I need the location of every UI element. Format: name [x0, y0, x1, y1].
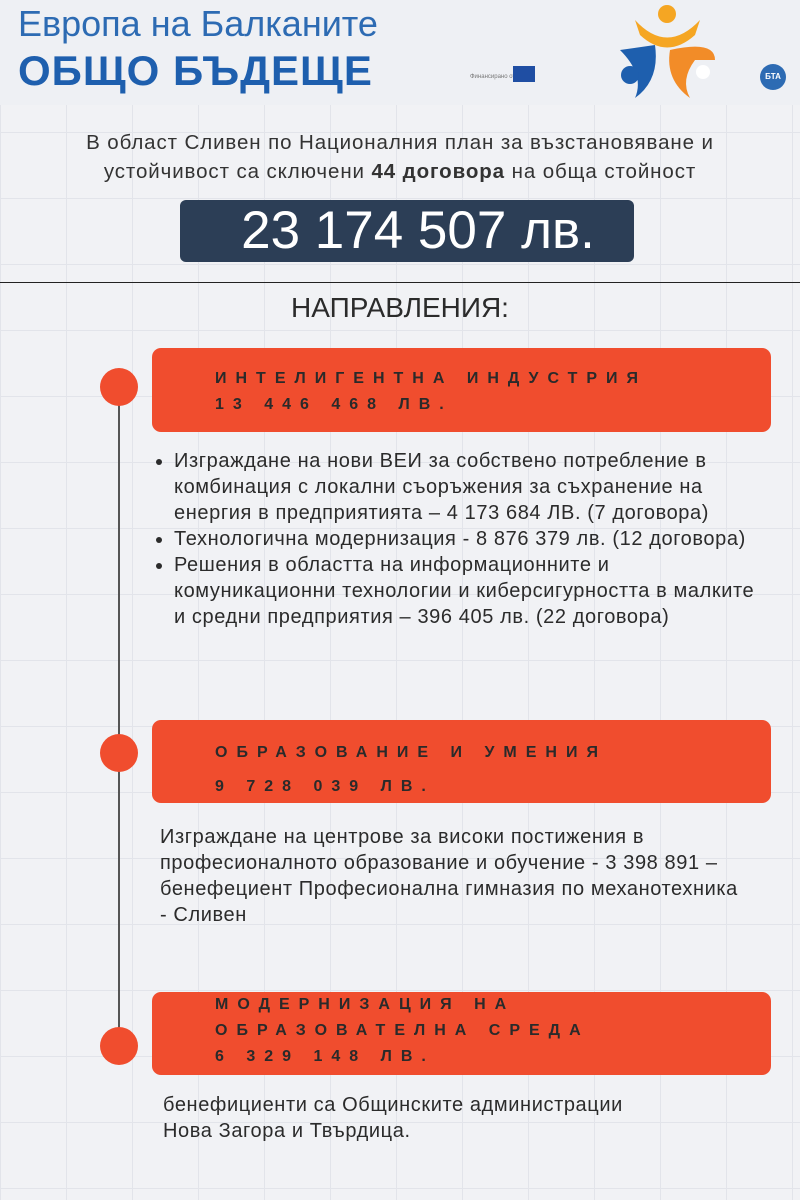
list: industry: Изграждане на нови ВЕИ за собствено потребление в: [174, 450, 707, 472]
text: education: - Сливен: [160, 904, 247, 926]
list: industry: енергия в предприятията – 4 173 684 ЛВ. (7 договора): [174, 502, 709, 524]
box: education environment: МОДЕРНИЗАЦИЯ НА: [215, 996, 515, 1013]
timeline dot 2: [100, 734, 138, 772]
box: education: [152, 720, 771, 803]
box: education environment: 6 329 148 ЛВ.: [215, 1048, 435, 1065]
EU logo: [470, 66, 535, 82]
BTA logo: [760, 64, 786, 90]
timeline dot 1: [100, 368, 138, 406]
project logo: [620, 5, 715, 98]
total amount box: 23 174 507 лв.: [241, 201, 595, 260]
intro text: [86, 131, 714, 183]
text: education: Изграждане на центрове за високи постижения в: [160, 826, 644, 848]
BTA logo: БТА: [765, 72, 781, 81]
EU logo: Финансирано от: [470, 74, 515, 80]
text: education: [160, 826, 738, 926]
box: education environment: [152, 992, 771, 1075]
header title: Европа на Балканите: [18, 3, 378, 44]
list: industry: Технологична модернизация - 8 876 379 лв. (12 договора): [174, 528, 746, 550]
list: industry: комбинация с локални съоръжения за съхранение на: [174, 476, 703, 498]
box: intelligent industry: [152, 348, 771, 432]
text: beneficiaries: бенефициенти са Общинските администрации: [163, 1094, 623, 1116]
list: industry: и средни предприятия – 396 405 лв. (22 договора): [174, 606, 669, 628]
intro text: устойчивост са сключени 44 договора на обща стойност: [104, 160, 696, 183]
list: industry: комуникационни технологии и киберсигурността в малките: [174, 580, 754, 602]
list: industry: Решения в областта на информационните и: [174, 554, 610, 576]
text: education: бенефециент Професионална гимназия по механотехника: [160, 878, 738, 900]
box: intelligent industry: 13 446 468 ЛВ.: [215, 396, 453, 413]
box: education: ОБРАЗОВАНИЕ И УМЕНИЯ: [215, 744, 607, 761]
header subtitle: ОБЩО БЪДЕЩЕ: [18, 47, 373, 94]
section heading: НАПРАВЛЕНИЯ:: [291, 292, 509, 323]
timeline dot 3: [100, 1027, 138, 1065]
box: education environment: ОБРАЗОВАТЕЛНА СРЕДА: [215, 1022, 590, 1039]
text: education: професионалното образование и обучение - 3 398 891 –: [160, 852, 718, 874]
text: beneficiaries: [163, 1094, 623, 1142]
timeline line: [118, 386, 120, 1046]
intro text: В област Сливен по Националния план за възстановяване и: [86, 131, 714, 154]
header banner: [0, 0, 800, 105]
box: intelligent industry: ИНТЕЛИГЕНТНА ИНДУСТРИЯ: [215, 370, 647, 387]
box: education: 9 728 039 ЛВ.: [215, 778, 435, 795]
text: beneficiaries: Нова Загора и Твърдица.: [163, 1120, 411, 1142]
list: industry: [156, 450, 754, 628]
